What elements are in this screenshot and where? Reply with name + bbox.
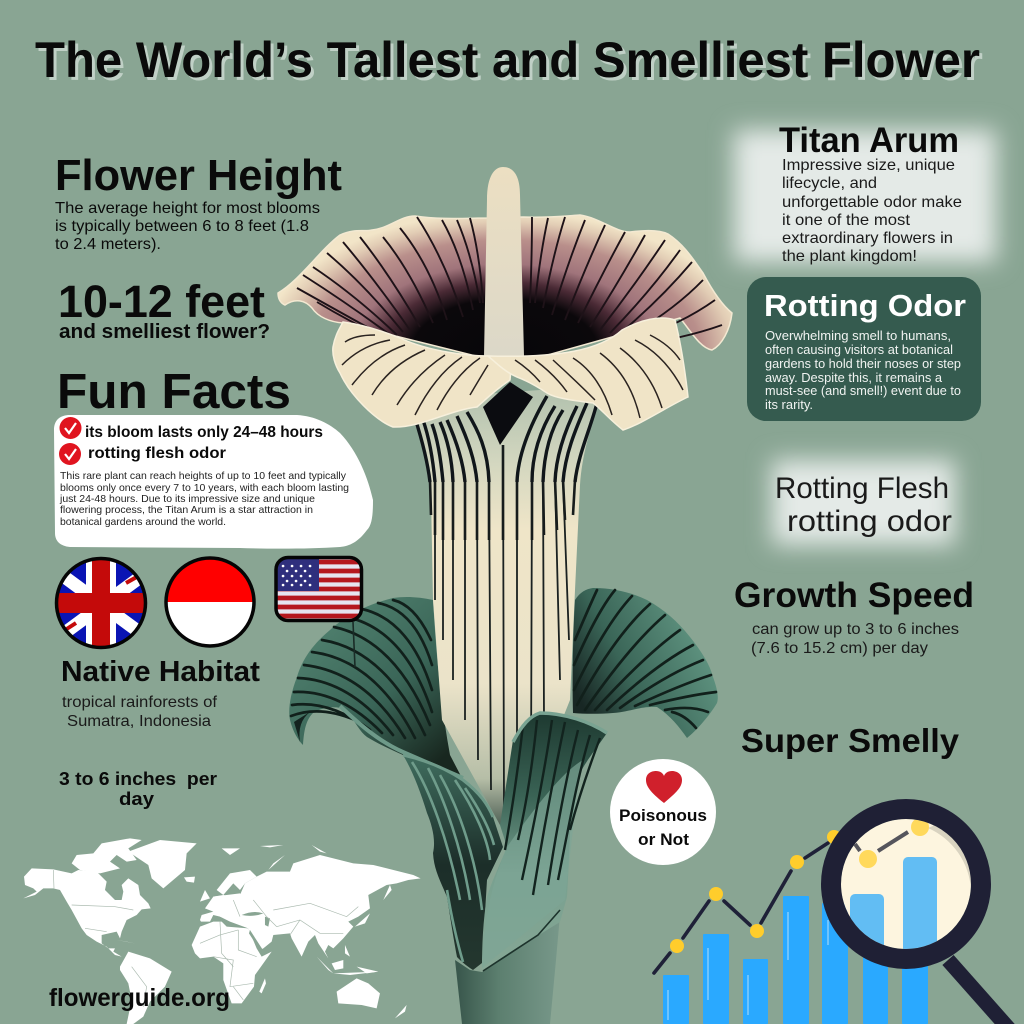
section: native habitat: Native Habitat [61, 656, 260, 688]
left spathe fold [403, 755, 503, 970]
section: growth speed: Growth Speed [734, 576, 974, 615]
chart: rising bars with magnifier [654, 809, 1010, 1024]
panel: titan arum: extraordinary flowers in [782, 230, 953, 247]
icon: US flag [276, 558, 362, 620]
panel: rotting odor: often causing visitors at botanical [765, 343, 953, 357]
world map [23, 838, 421, 1024]
panel: titan arum [734, 121, 996, 265]
bar highlights [668, 912, 828, 1020]
illustration: titan arum flower [278, 167, 732, 1024]
section: 10-12 feet: 10-12 feet [58, 276, 265, 327]
icon: UK flag [55, 555, 150, 650]
panel: rotting odor: gardens to hold their noses or step [765, 357, 961, 371]
trend points [670, 830, 841, 953]
petal veins, upper left [297, 217, 483, 338]
panel: rotting odor [747, 277, 981, 421]
section: native habitat: Sumatra, Indonesia [67, 713, 211, 730]
panel: rotting odor: Rotting Odor [764, 288, 966, 323]
magnifier handle [948, 960, 1010, 1024]
panel: titan arum: Titan Arum [779, 121, 959, 160]
panel: titan arum: lifecycle, and [782, 175, 877, 192]
magnifier lens [831, 809, 981, 964]
fact 1: its bloom lasts only 24–48 hours [85, 424, 323, 441]
lower left petal [333, 322, 512, 427]
right spathe fold [482, 713, 607, 971]
striped tube [413, 382, 598, 825]
title: The World’s Tallest and Smelliest Flower [38, 35, 983, 91]
right upper leaf [573, 588, 718, 738]
panel: titan arum: Impressive size, unique [782, 157, 955, 174]
title: The World’s Tallest and Smelliest Flower [35, 32, 980, 88]
section: flower height: is typically between 6 to 8 feet (1.8 [55, 218, 309, 235]
panel: rotting flesh: rotting odor [787, 505, 952, 538]
petal back with throat [278, 215, 732, 365]
section: 10-12 feet: and smelliest flower? [59, 321, 270, 343]
fun facts paragraph: This rare plant can reach heights of up to 10 feet and typically [60, 470, 347, 482]
text: website: flowerguide.org [49, 984, 230, 1012]
panel: fun facts [54, 415, 373, 549]
left upper leaf [289, 597, 463, 780]
section: native habitat [61, 656, 260, 730]
text: growth per day [59, 769, 217, 809]
panel: titan arum: the plant kingdom! [782, 248, 917, 265]
section: flower height: to 2.4 meters). [55, 236, 161, 253]
section: growth speed: (7.6 to 15.2 cm) per day [751, 640, 928, 657]
lower right petal [488, 318, 688, 430]
petal veins, upper right [530, 217, 722, 345]
panel: rotting flesh [772, 460, 955, 545]
section: flower height [55, 151, 342, 253]
icon: Indonesia flag [165, 555, 255, 646]
fun facts paragraph: botanical gardens around the world. [60, 516, 226, 528]
panel: titan arum: unforgettable odor make [782, 194, 962, 211]
fact 2: rotting flesh odor [88, 445, 226, 462]
badge: poisonous or not [610, 759, 716, 865]
fun facts paragraph: flowering process, the Titan Arum is a star attraction in [60, 504, 313, 516]
fun facts paragraph [59, 470, 349, 528]
lower stem [455, 915, 560, 1024]
icon: check 1 [60, 417, 82, 439]
bars [663, 896, 928, 1024]
icon: check 2 [59, 443, 81, 465]
text: growth per day: 3 to 6 inches per [59, 769, 217, 789]
badge: poisonous or not: or Not [638, 830, 689, 849]
spadix [484, 167, 524, 356]
badge: poisonous or not: Poisonous [619, 806, 707, 825]
panel: titan arum: it one of the most [782, 212, 911, 229]
trend line [654, 843, 828, 973]
section: growth speed: can grow up to 3 to 6 inches [752, 621, 959, 638]
panel: rotting flesh: Rotting Flesh [775, 472, 949, 505]
fun facts paragraph: blooms only once every 7 to 10 years, with each bloom lasting [60, 482, 349, 494]
section: flower height: Flower Height [55, 151, 342, 200]
fun facts paragraph: just 24-48 hours. Due to its impressive size and unique [59, 493, 315, 505]
section: native habitat: tropical rainforests of [62, 694, 218, 711]
heading: super smelly: Super Smelly [741, 722, 960, 759]
section: flower height: The average height for most blooms [55, 200, 320, 217]
section: growth speed [734, 576, 974, 657]
text: growth per day: day [119, 789, 154, 809]
panel: rotting odor: away. Despite this, it remains a [765, 371, 942, 385]
panel: rotting odor: must-see (and smell!) event due to [765, 384, 961, 398]
icon: heart [646, 771, 682, 803]
panel: rotting odor: Overwhelming smell to humans, [765, 329, 951, 343]
heading: fun facts: Fun Facts [57, 365, 291, 419]
panel: rotting odor: its rarity. [765, 398, 813, 412]
